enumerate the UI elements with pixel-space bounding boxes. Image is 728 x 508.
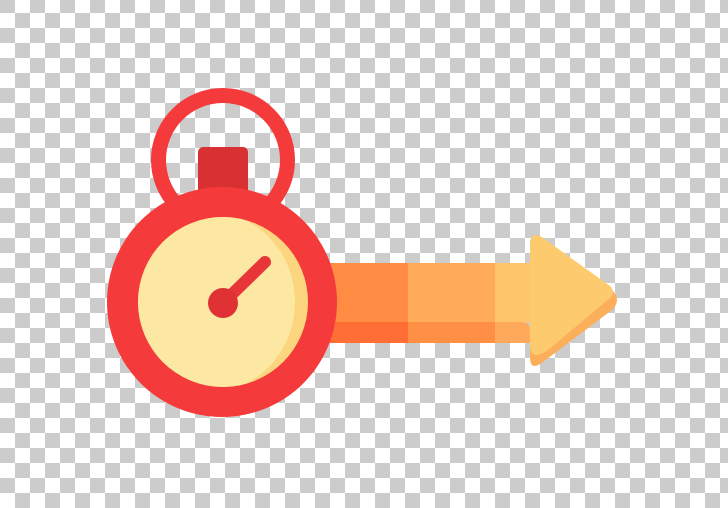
illustration: stopwatch with arrow [107, 88, 617, 417]
top ring [158, 96, 288, 224]
face [138, 217, 308, 387]
body [107, 187, 337, 417]
crown [198, 147, 248, 197]
stopwatch [107, 96, 337, 417]
arrow [320, 235, 617, 366]
hand [223, 262, 265, 303]
